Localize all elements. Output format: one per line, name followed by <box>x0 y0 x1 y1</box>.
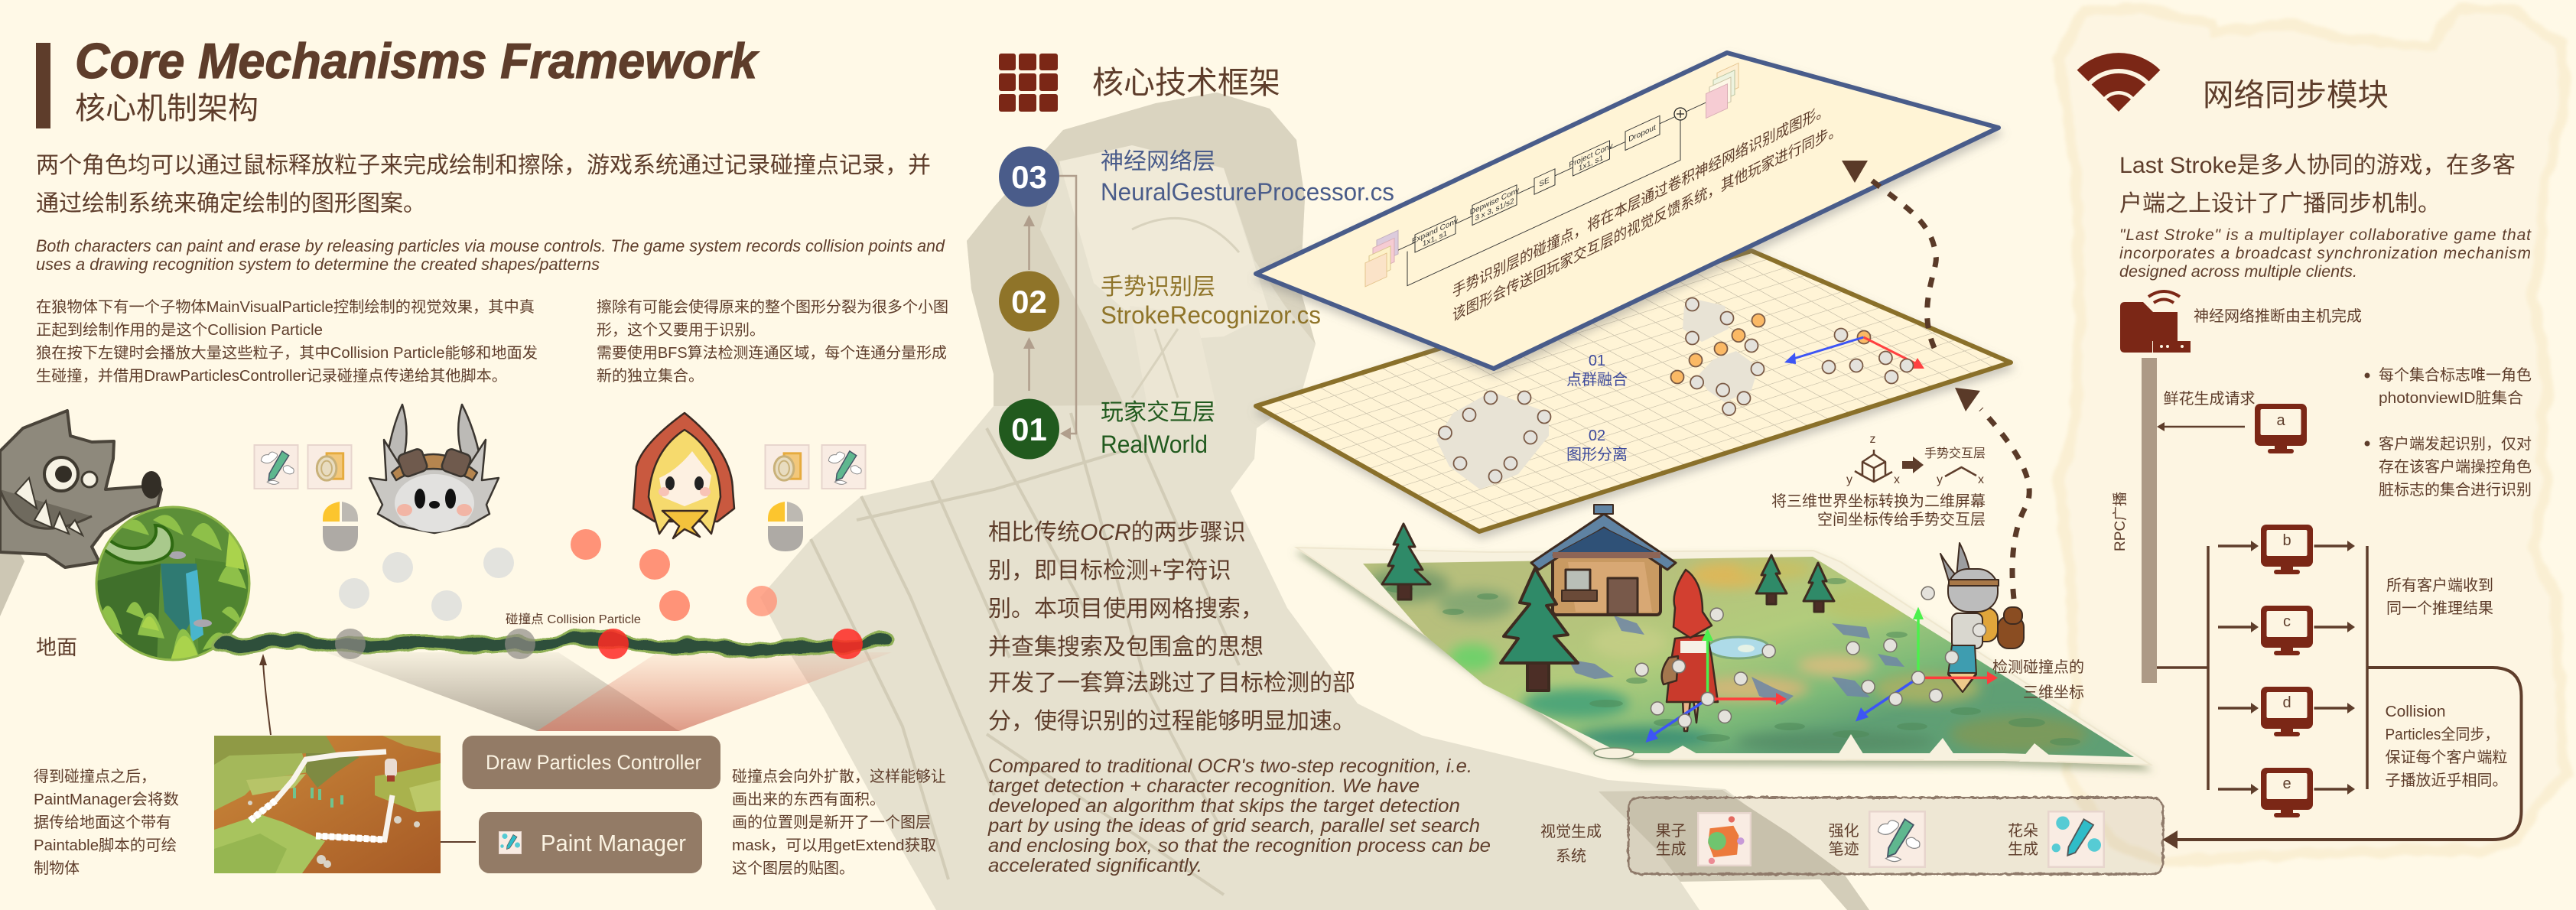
monitor b: b <box>2282 532 2291 549</box>
left description column: 生碰撞，并借用DrawParticlesController记录碰撞点传递给其他脚本。 <box>36 367 507 385</box>
diagram: coordinate conversion: x <box>1894 473 1900 486</box>
plane: gesture layer grid <box>1256 251 2011 531</box>
white paint path <box>250 752 392 840</box>
diagram: coordinate conversion: z <box>1869 433 1875 446</box>
arrow: dashed interaction to gesture <box>1955 388 2029 599</box>
text: paint manager right note: 碰撞点会向外扩散，这样能够让 <box>732 768 946 785</box>
layer 02: 手势识别层 <box>1101 275 1215 300</box>
button: paint manager: Paint Manager <box>541 830 686 856</box>
box: SE <box>1534 169 1555 194</box>
item: fruit generation: 生成 <box>1656 840 1686 858</box>
label: point cluster merge: 01 <box>1589 353 1605 369</box>
label: point cluster merge <box>1566 353 1628 388</box>
item: flower generation: 花朵 <box>2008 822 2038 840</box>
monitor e <box>2261 768 2313 817</box>
input feature stack <box>1365 230 1398 287</box>
background sketch silhouette <box>760 93 1869 910</box>
right description column: 需要使用BFS算法检测连通区域，每个连通分量形成 <box>597 344 947 362</box>
arrow: sync loop to visual system <box>2163 668 2521 849</box>
item: stroke enhancement: 笔迹 <box>1829 840 1859 858</box>
label: ground: 地面 <box>36 636 77 659</box>
intro text english: Both characters can paint and erase by releasing particles via mouse controls. The game system records collision points and <box>36 236 945 255</box>
text: OCR comparison chinese: 别。本项目使用网格搜索， <box>988 596 1264 622</box>
box: expand conv: 1x1, s1 <box>1423 229 1447 249</box>
button: draw particles controller <box>462 736 720 789</box>
text: coordinate conversion note <box>1771 492 1986 528</box>
wolf teeth <box>15 478 83 535</box>
box: SE: SE <box>1539 176 1550 189</box>
box: depwise conv: 3 x 3, s1/s2 <box>1475 197 1514 223</box>
box: dropout: Dropout <box>1628 123 1656 144</box>
panel: visual generation box <box>1628 798 2163 874</box>
text: OCR comparison chinese: 分，使得识别的过程能够明显加速。 <box>988 709 1355 734</box>
layer 02: 02 <box>1011 284 1047 320</box>
label: collision particle: 碰撞点 Collision Particle <box>506 613 641 626</box>
bullet notes <box>2365 366 2532 499</box>
diagram: coordinate conversion: x <box>1978 473 1984 486</box>
intro text english <box>36 236 945 274</box>
bullet notes: 脏标志的集合进行识别 <box>2379 481 2532 499</box>
left description column <box>36 298 538 385</box>
layer stack connector lines <box>1023 176 1076 440</box>
gray beam <box>326 652 679 731</box>
bullet notes: 每个集合标志唯一角色 <box>2379 366 2532 384</box>
text: host inference: 神经网络推断由主机完成 <box>2194 307 2362 325</box>
pebbles <box>248 801 420 868</box>
map: cottage <box>1531 505 1676 615</box>
text: paint manager right note: 画的位置则是新开了一个图层 <box>732 814 931 831</box>
panel: network parchment background <box>2059 9 2566 861</box>
heading block: core mechanisms <box>36 33 759 128</box>
text: network intro english: "Last Stroke" is a multiplayer collaborative game that <box>2119 226 2532 244</box>
text: detect collision 3d <box>1992 658 2084 701</box>
text: OCR comparison english: accelerated significantly. <box>988 855 1202 876</box>
box: project conv: 1x1, s1 <box>1579 153 1603 173</box>
text: paint manager right note: 这个图层的贴图。 <box>732 860 854 877</box>
item: stroke enhancement <box>1829 811 1925 867</box>
map: red riding hood <box>1662 570 1718 731</box>
text: network intro chinese: 户端之上设计了广播同步机制。 <box>2119 191 2441 216</box>
character: red hood girl <box>633 413 734 538</box>
box: depwise conv: Depwise Conv <box>1470 185 1520 217</box>
cube axes <box>1855 450 1976 482</box>
music notes <box>294 788 342 808</box>
pond <box>1708 637 1769 658</box>
orange particles <box>571 529 777 621</box>
monitor a <box>2255 404 2307 453</box>
text: OCR comparison chinese: 并查集搜索及包围盒的思想 <box>988 635 1264 660</box>
rooftop patches <box>1568 616 1904 705</box>
plane text: 手势识别层的碰撞点，将在本层通过卷积神经网络识别成图形。 <box>1452 100 1830 301</box>
text: OCR comparison chinese: 别，即目标检测+字符识 <box>988 558 1231 583</box>
text: OCR comparison chinese <box>988 520 1355 734</box>
layer 02 <box>999 271 1321 332</box>
text: paint manager left note: 据传给地面这个带有 <box>34 814 171 831</box>
text: paint manager left note: 得到碰撞点之后， <box>34 768 156 785</box>
left description column: 在狼物体下有一个子物体MainVisualParticle控制绘制的视觉效果，其中真 <box>36 298 535 316</box>
diagram: coordinate conversion: 手势交互层 <box>1924 447 1986 460</box>
point circles <box>1439 298 1898 483</box>
intro text chinese <box>36 153 931 216</box>
mouse icon right <box>768 502 803 551</box>
wolf eye <box>44 457 78 491</box>
goggles <box>392 454 477 480</box>
plane text: 该图形会传送回玩家交互层的视觉反馈系统，其他玩家进行同步。 <box>1452 120 1842 325</box>
left description column: 正起到绘制作用的是这个Collision Particle <box>36 321 323 339</box>
right description column: 新的独立集合。 <box>597 367 704 385</box>
mouse icon left <box>323 502 358 551</box>
map: big tree <box>1501 568 1578 691</box>
illustration: big wolf <box>0 411 161 616</box>
gray particles <box>339 548 514 621</box>
item: flower generation <box>2008 811 2104 867</box>
monitor c <box>2261 606 2313 655</box>
heading: core tech framework <box>999 54 1280 112</box>
text: particle sync: Collision <box>2385 704 2446 720</box>
box: project conv: Project Conv <box>1569 141 1613 170</box>
layer 03: NeuralGestureProcessor.cs <box>1101 178 1394 206</box>
map: rabbit with backpack <box>1940 543 2024 692</box>
heading: core tech framework: 核心技术框架 <box>1092 65 1280 100</box>
text: paint manager right note: 画出来的东西有面积。 <box>732 791 885 808</box>
box: dropout <box>1625 115 1660 150</box>
icon: grid <box>999 54 1058 112</box>
map: small tree left <box>1382 524 1430 600</box>
text: particle sync <box>2385 704 2507 789</box>
left description column: 狼在按下左键时会播放大量这些粒子，其中Collision Particle能够和地面发 <box>36 344 538 362</box>
text: all clients receive <box>2386 577 2493 617</box>
RPC broadcast bar <box>2112 358 2157 683</box>
button: paint manager <box>479 812 702 873</box>
character: wolf player <box>369 405 499 533</box>
text: OCR comparison english: part by using the ideas of grid search, parallel set search <box>987 815 1480 837</box>
connector: screenshot to paint manager <box>441 841 476 843</box>
heading: network sync: 网络同步模块 <box>2203 77 2389 112</box>
text: coordinate conversion note: 空间坐标传给手势交互层 <box>1817 511 1986 528</box>
gray blobs <box>1436 300 1758 489</box>
collision points <box>335 629 863 659</box>
right description column: 形，这个又要用于识别。 <box>597 321 765 339</box>
text: detect collision 3d: 三维坐标 <box>2023 684 2084 701</box>
intro text english: uses a drawing recognition system to determine the created shapes/patterns <box>36 255 600 274</box>
text: paint manager right note: mask，可以用getExtend获取 <box>732 837 936 854</box>
text: detect collision 3d: 检测碰撞点的 <box>1992 658 2084 676</box>
bullet notes: 存在该客户端操控角色 <box>2379 458 2532 476</box>
monitor d: d <box>2282 694 2291 711</box>
text: flower request: 鲜花生成请求 <box>2163 390 2255 408</box>
text: network intro chinese: Last Stroke是多人协同的游戏，在多客 <box>2119 153 2516 178</box>
layer 01 <box>999 399 1215 459</box>
text: paint manager left note: 制物体 <box>34 860 80 877</box>
small rabbit player <box>385 759 397 782</box>
text: network intro english <box>2119 226 2532 281</box>
broadcast branch lines and arrows <box>2157 541 2367 795</box>
button: draw particles controller: Draw Particles Controller <box>486 751 701 774</box>
arrow: client a to RPC <box>2157 422 2245 431</box>
arrow <box>1902 457 1924 473</box>
icon: paint card <box>499 832 522 853</box>
red beam <box>537 652 892 731</box>
map: small trees right <box>1756 555 1834 612</box>
watercolor washes <box>1365 561 2088 752</box>
label: shape separation: 02 <box>1589 427 1605 444</box>
layer 03: 神经网络层 <box>1101 149 1215 174</box>
illustration: ground circle scene <box>95 506 251 661</box>
text: all clients receive: 同一个推理结果 <box>2386 600 2493 617</box>
bullet notes: 客户端发起识别，仅对 <box>2379 435 2532 453</box>
subtitle: 核心机制架构 <box>75 92 259 125</box>
text: particle sync: 保证每个客户端粒 <box>2385 749 2507 766</box>
text: paint manager left note: PaintManager会将数 <box>34 791 179 808</box>
connectors <box>1398 102 1706 290</box>
text: network intro english: designed across multiple clients. <box>2119 263 2357 281</box>
text: OCR comparison english: developed an algorithm that skips the target detection <box>988 795 1460 817</box>
accent bar <box>36 43 50 128</box>
label: visual generation system <box>1540 823 1602 865</box>
monitor e: e <box>2282 775 2291 792</box>
output feature stack <box>1706 63 1738 119</box>
item: fruit generation <box>1656 813 1751 866</box>
text: network intro chinese <box>2119 153 2516 216</box>
text: coordinate conversion note: 将三维世界坐标转换为二维屏幕 <box>1771 492 1986 510</box>
label: shape separation <box>1566 427 1628 463</box>
text: OCR comparison english: and enclosing box, so that the recognition process can be <box>988 835 1491 856</box>
diagram: coordinate conversion: y <box>1846 473 1852 486</box>
diagram: coordinate conversion <box>1846 433 1986 486</box>
box: expand conv: Expand Conv <box>1412 216 1459 246</box>
spotlight beams to controller <box>326 652 892 731</box>
map: character axes <box>1635 587 1998 743</box>
layer 02: StrokeRecognizor.cs <box>1101 301 1321 329</box>
grass dapples <box>1386 578 2080 746</box>
label: RPC broadcast: RPC广播 <box>2112 492 2129 551</box>
illustration: game map <box>1285 535 2157 772</box>
label: shape separation: 图形分离 <box>1566 446 1628 463</box>
title: Core Mechanisms Framework <box>75 33 759 89</box>
item cards right <box>765 445 866 489</box>
neural network diagram <box>1365 63 1738 305</box>
label: visual generation system: 视觉生成 <box>1540 823 1602 840</box>
item: fruit generation: 果子 <box>1656 823 1686 840</box>
text: particle sync: 子播放近乎相同。 <box>2385 772 2507 789</box>
intro text chinese: 两个角色均可以通过鼠标释放粒子来完成绘制和擦除，游戏系统通过记录碰撞点记录，并 <box>36 153 931 178</box>
text: OCR comparison english: target detection + character recognition. We have <box>988 775 1420 797</box>
label: point cluster merge: 点群融合 <box>1566 371 1628 388</box>
text: particle sync: Particles全同步， <box>2385 726 2500 743</box>
text: OCR comparison chinese: 开发了一套算法跳过了目标检测的部 <box>988 671 1355 696</box>
plane: neural network layer <box>1256 53 1999 369</box>
map: tracked points <box>1635 587 1986 727</box>
plus node <box>1674 108 1686 120</box>
item cards left <box>254 445 352 489</box>
text: paint manager left note: Paintable脚本的可绘 <box>34 837 177 854</box>
forest and grass <box>214 736 337 765</box>
axes arrows <box>1784 337 1924 372</box>
layer 01: RealWorld <box>1101 431 1208 458</box>
text: paint manager left note <box>34 768 179 877</box>
right description column: 擦除有可能会使得原来的整个图形分裂为很多个小图 <box>597 298 948 316</box>
layer 01: 01 <box>1011 411 1047 447</box>
text: OCR comparison english: Compared to traditional OCR's two-step recognition, i.e. <box>988 756 1472 777</box>
torn paper teeth <box>1660 734 2057 762</box>
icon: host server <box>2120 291 2191 353</box>
item: flower generation: 生成 <box>2008 840 2038 858</box>
layer 01: 玩家交互层 <box>1101 400 1215 425</box>
right description column <box>597 298 948 385</box>
arrow: screenshot to ground <box>259 654 271 735</box>
monitor b <box>2261 525 2313 574</box>
text: all clients receive: 所有客户端收到 <box>2386 577 2493 594</box>
diagram: coordinate conversion: y <box>1937 473 1943 486</box>
arrow: dashed gesture to neural <box>1842 161 1936 348</box>
text: OCR comparison chinese: 相比传统OCR的两步骤识 <box>988 520 1246 545</box>
layer 03 <box>999 147 1394 206</box>
painted ground stroke <box>220 638 887 651</box>
layer 03: 03 <box>1011 159 1047 195</box>
text: network intro english: incorporates a broadcast synchronization mechanism <box>2119 245 2531 262</box>
bullet notes: photonviewID脏集合 <box>2379 389 2523 407</box>
label: visual generation system: 系统 <box>1556 847 1586 865</box>
icon: wifi <box>2077 53 2160 112</box>
text: paint manager right note <box>732 768 946 877</box>
intro text chinese: 通过绘制系统来确定绘制的图形图案。 <box>36 191 426 216</box>
monitor d <box>2261 687 2313 736</box>
text: OCR comparison english <box>987 756 1491 876</box>
monitor c: c <box>2283 613 2291 630</box>
game screenshot <box>214 736 441 873</box>
item: stroke enhancement: 强化 <box>1829 822 1859 840</box>
monitor a: a <box>2276 412 2285 429</box>
